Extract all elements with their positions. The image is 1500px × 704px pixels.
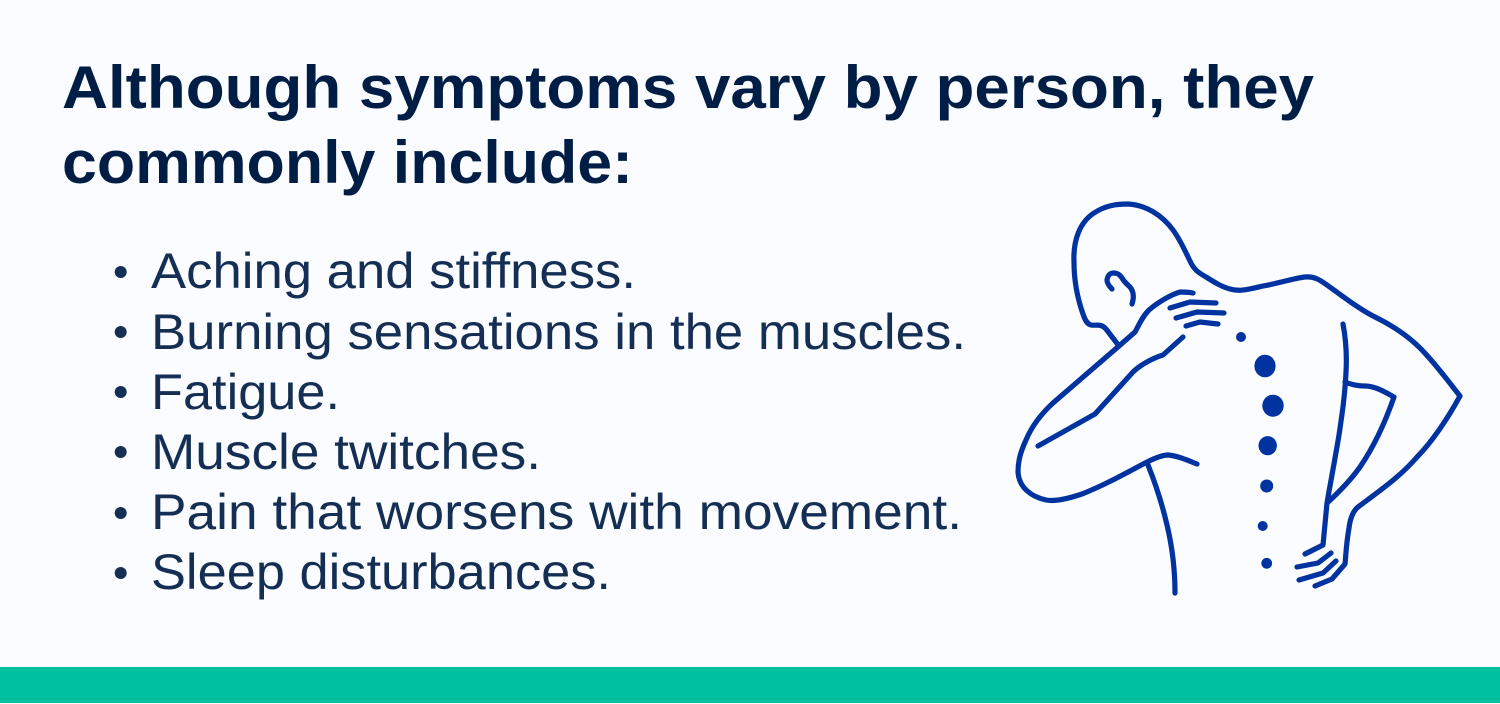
fingers on back <box>1297 553 1336 580</box>
waist line <box>1327 382 1394 503</box>
symptom list: Fatigue. <box>151 364 340 420</box>
icon: person holding neck and lower back <box>1018 204 1460 593</box>
symptom list: Pain that worsens with movement. <box>151 484 962 540</box>
arm raised to neck, upper edge to elbow <box>1018 292 1197 501</box>
inner back line and hand <box>1305 324 1346 554</box>
symptom list: Burning sensations in the muscles. <box>151 304 966 360</box>
bottom green band <box>0 667 1500 703</box>
symptom list: Muscle twitches. <box>151 424 541 480</box>
torso side <box>1148 465 1175 593</box>
title: Although symptoms vary by person, they <box>62 53 1314 121</box>
arm raised to neck, lower edge <box>1038 337 1183 446</box>
title <box>62 53 1314 196</box>
fingers on neck <box>1170 302 1224 326</box>
ear <box>1107 273 1133 304</box>
spine pain dots <box>1236 332 1284 569</box>
symptom list: Aching and stiffness. <box>151 243 636 299</box>
symptom list <box>115 243 966 600</box>
head and shoulders outline <box>1074 204 1460 586</box>
title: commonly include: <box>62 128 633 196</box>
symptom list: Sleep disturbances. <box>151 544 611 600</box>
